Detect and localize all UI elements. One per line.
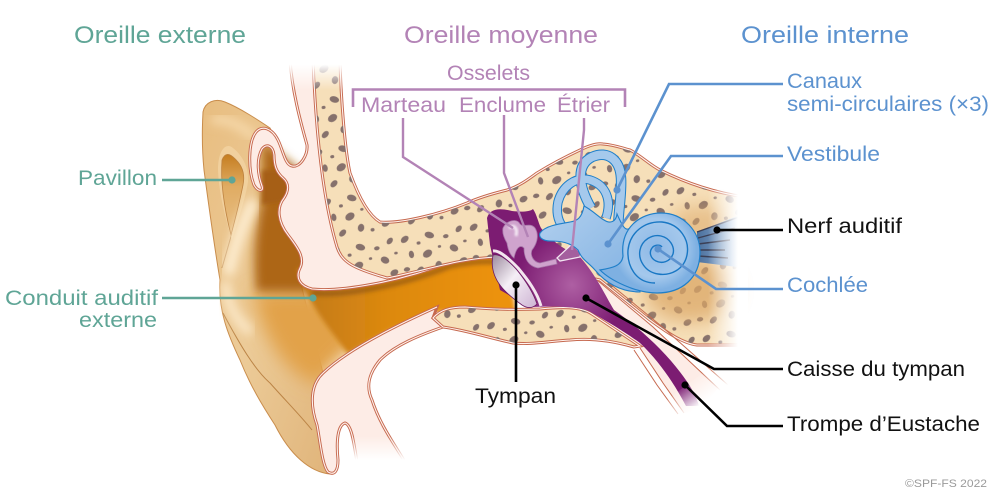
label: Pavillon with leader xyxy=(78,166,236,190)
leader: Étrier xyxy=(572,118,584,250)
label: Conduit auditif externe with leader: externe xyxy=(79,308,157,332)
label: Trompe d'Eustache with leader: Trompe d’Eustache xyxy=(787,412,980,436)
label: Pavillon with leader: Pavillon xyxy=(78,166,157,190)
concha and external auditory canal shading xyxy=(252,140,516,385)
label: Nerf auditif with leader: Nerf auditif xyxy=(787,214,902,238)
top fade of upper skin and bone xyxy=(284,56,346,90)
right fade of bone xyxy=(708,190,748,350)
label: Conduit auditif externe with leader: Conduit auditif xyxy=(5,286,158,310)
group: ossicles labels xyxy=(353,62,625,117)
label: Vestibule with leader xyxy=(604,142,880,248)
tube end fade xyxy=(648,354,746,438)
label: Canaux semi-circulaires with leader xyxy=(613,69,989,194)
label: Vestibule with leader: Vestibule xyxy=(787,142,880,166)
label: Cochlée with leader: Cochlée xyxy=(787,273,868,297)
tympanic cavity and Eustachian tube xyxy=(487,209,699,406)
leader: Marteau xyxy=(403,118,513,228)
label: Nerf auditif with leader xyxy=(713,214,902,238)
upper skin lining xyxy=(250,60,492,290)
lower skin lining xyxy=(312,307,443,473)
outer ear body xyxy=(202,100,330,474)
heading: Oreille externe: Oreille externe xyxy=(74,22,246,49)
inner ear: semicircular canals, vestibule xyxy=(540,155,640,292)
Eustachian tube lining xyxy=(593,279,728,414)
lower bone of canal xyxy=(433,307,640,347)
copyright: ©SPF-FS 2022 xyxy=(905,478,987,490)
label: Cochlée with leader xyxy=(654,245,868,297)
label: Conduit auditif externe with leader xyxy=(5,286,317,332)
label: Étrier: Étrier xyxy=(557,94,610,117)
label: Caisse du tympan with leader xyxy=(582,294,965,381)
label: Tympan with leader: Tympan xyxy=(475,384,556,408)
cochlea xyxy=(600,213,700,293)
leader: Enclume xyxy=(504,115,528,237)
antihelix highlight xyxy=(229,205,252,270)
eardrum xyxy=(492,251,541,308)
label: Marteau: Marteau xyxy=(361,94,446,117)
label: Trompe d'Eustache with leader xyxy=(681,381,980,436)
bracket xyxy=(353,90,625,107)
label: Osselets: Osselets xyxy=(447,62,530,85)
lower fade xyxy=(343,436,415,470)
temporal bone xyxy=(313,60,745,345)
lower antihelix highlight xyxy=(226,285,248,330)
label: Caisse du tympan with leader: Caisse du tympan xyxy=(787,357,965,381)
scapha hollow of the pinna xyxy=(218,146,248,240)
ossicles: malleus, incus, stapes xyxy=(503,221,581,268)
heading: Oreille moyenne: Oreille moyenne xyxy=(404,22,598,49)
label: Canaux semi-circulaires with leader: semi-circulaires (×3) xyxy=(787,92,989,116)
auditory nerve xyxy=(697,213,745,268)
label: Enclume: Enclume xyxy=(459,94,546,117)
label: Canaux semi-circulaires with leader: Canaux xyxy=(787,69,862,93)
heading: Oreille interne: Oreille interne xyxy=(741,22,909,49)
illustration: ear anatomy xyxy=(202,60,748,474)
label: Tympan with leader xyxy=(475,281,556,408)
